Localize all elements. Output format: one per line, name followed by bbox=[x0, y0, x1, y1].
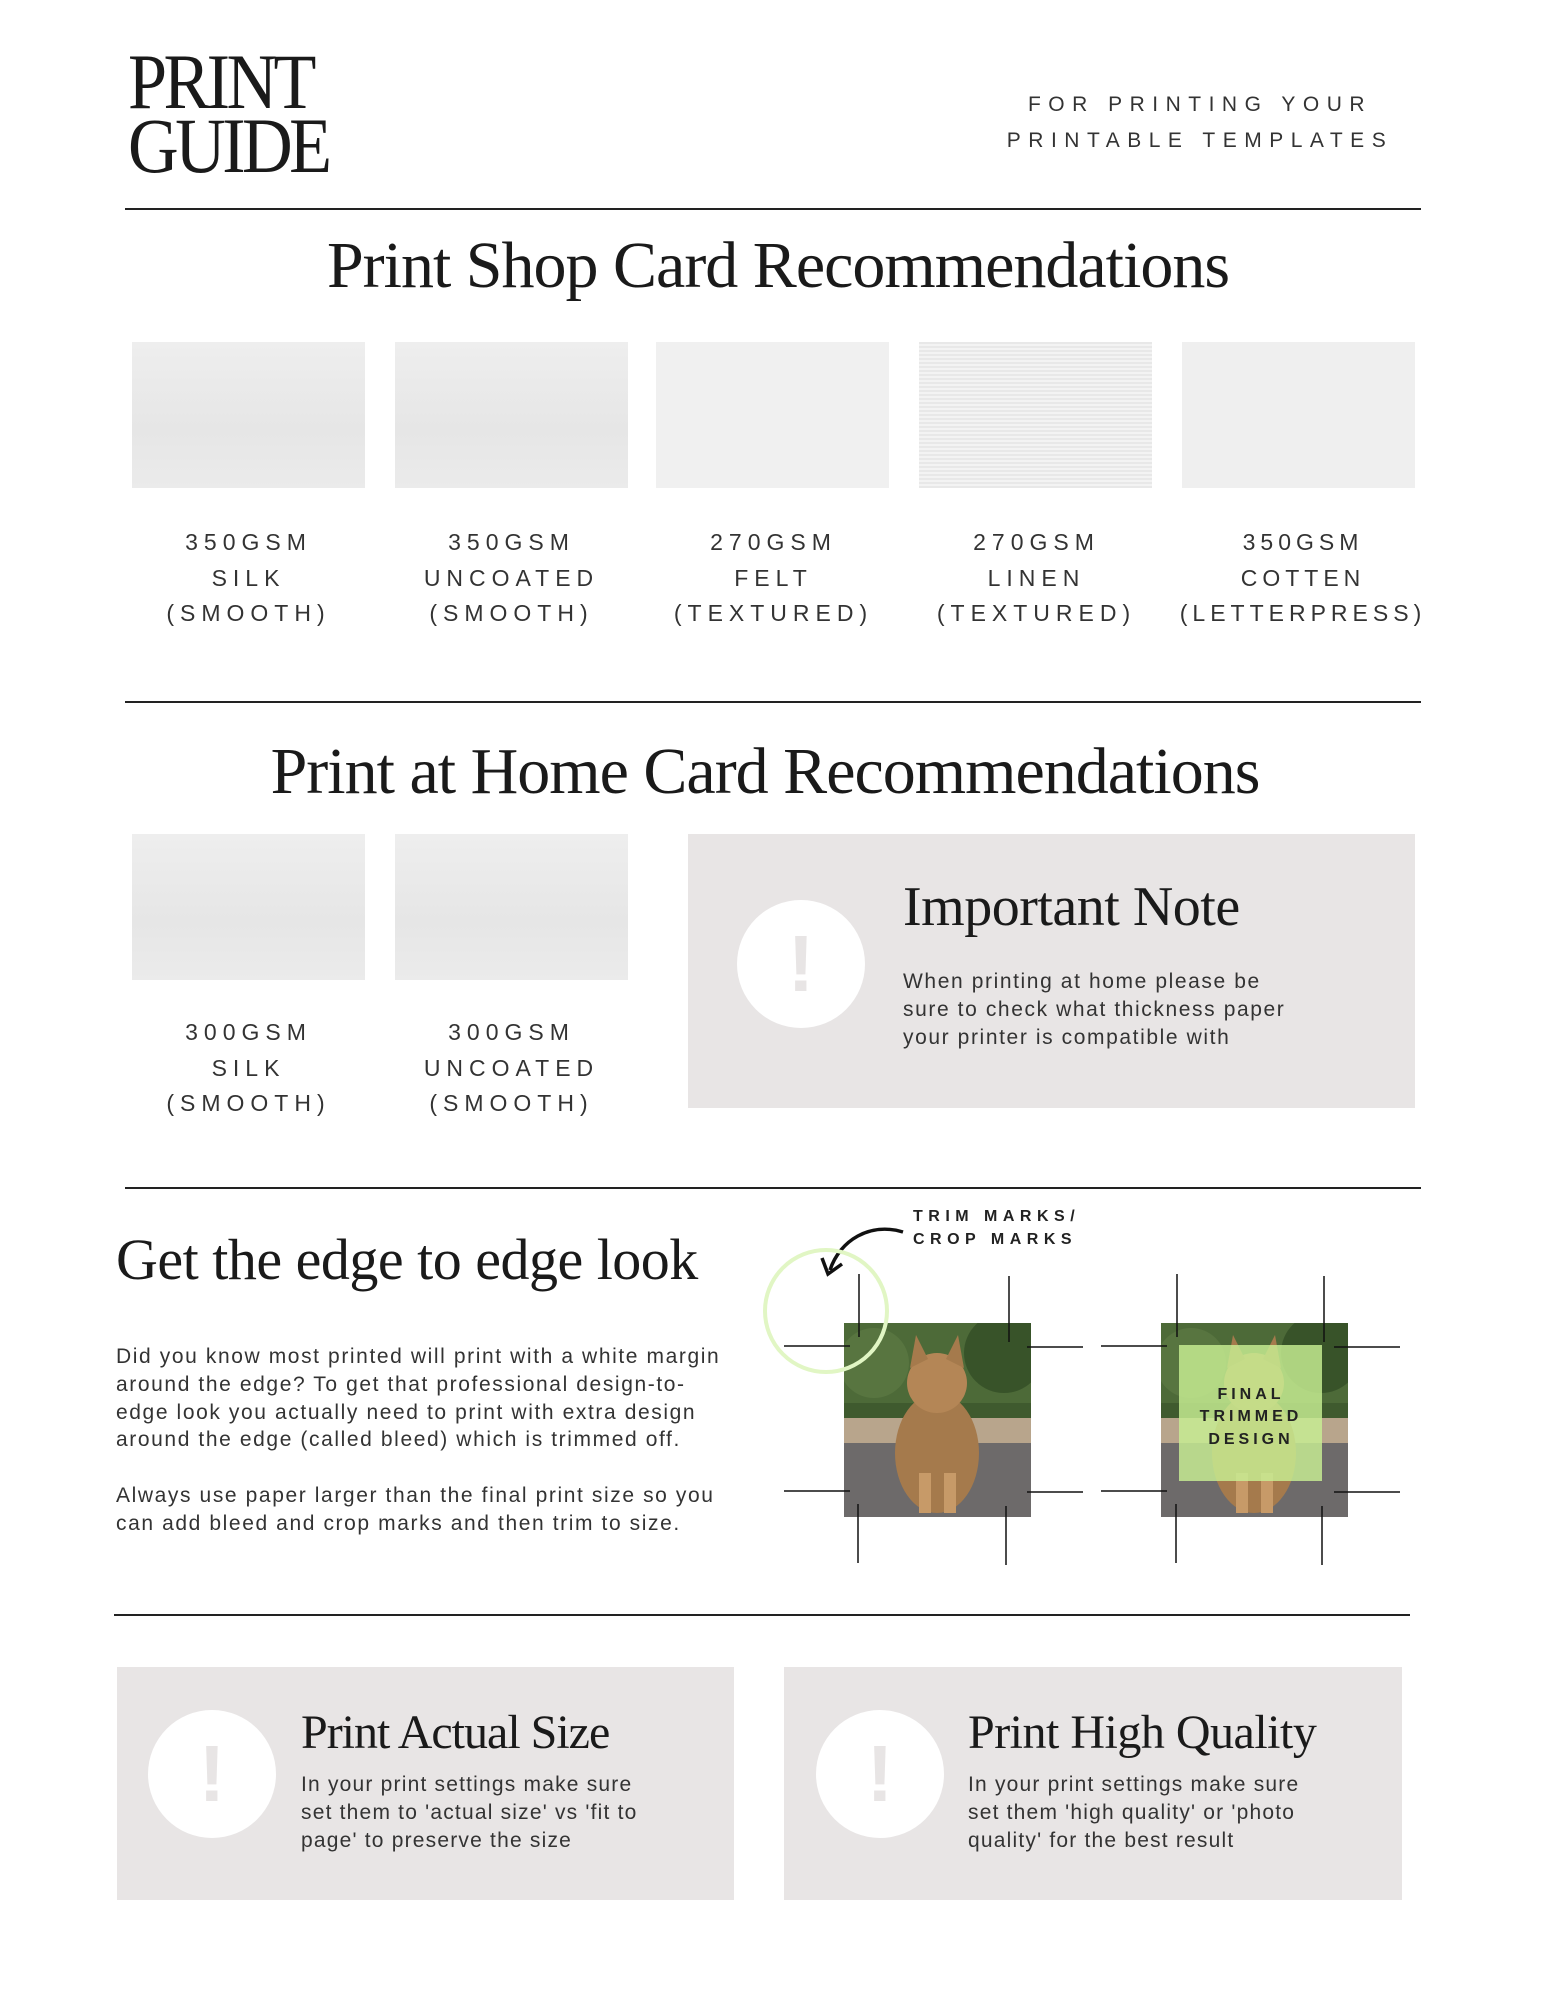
label: COTTEN bbox=[1241, 564, 1365, 590]
title: PRINT bbox=[128, 38, 313, 125]
icon: exclamation: ! bbox=[788, 919, 814, 1008]
label: SILK bbox=[212, 1054, 285, 1080]
text: quality' for the best result bbox=[968, 1829, 1234, 1852]
heading: print at home: Print at Home Card Recommendations bbox=[271, 735, 1259, 808]
heading: print shop: Print Shop Card Recommendations bbox=[327, 229, 1229, 302]
label: (TEXTURED) bbox=[674, 600, 873, 626]
diagram: crop marks bbox=[763, 1228, 1400, 1565]
title: GUIDE bbox=[128, 102, 328, 189]
icon: exclamation: ! bbox=[199, 1729, 225, 1818]
callout: trim marks: TRIM MARKS/ bbox=[913, 1208, 1080, 1225]
label: (SMOOTH) bbox=[166, 1090, 331, 1116]
text: bleed explanation: around the edge? To get that professional design-to- bbox=[116, 1373, 686, 1396]
text: In your print settings make sure bbox=[301, 1773, 632, 1796]
label: (TEXTURED) bbox=[937, 600, 1136, 626]
text: bleed explanation: Always use paper larger than the final print size so you bbox=[116, 1484, 715, 1507]
subtitle: PRINTABLE TEMPLATES bbox=[1007, 129, 1393, 152]
text bbox=[968, 1773, 1299, 1852]
panel: print high quality bbox=[784, 1667, 1402, 1900]
panel: print actual size bbox=[117, 1667, 734, 1900]
label: (SMOOTH) bbox=[429, 600, 594, 626]
text: bleed explanation: edge look you actually need to print with extra design bbox=[116, 1401, 696, 1424]
label: (SMOOTH) bbox=[429, 1090, 594, 1116]
label bbox=[674, 529, 873, 626]
callout: trim marks: CROP MARKS bbox=[913, 1231, 1077, 1248]
text: bleed explanation: can add bleed and crop marks and then trim to size. bbox=[116, 1512, 681, 1535]
text: bleed explanation: Did you know most printed will print with a white margin bbox=[116, 1345, 720, 1368]
icon: exclamation bbox=[148, 1710, 276, 1838]
text: page' to preserve the size bbox=[301, 1829, 572, 1852]
diagram: crop marks: DESIGN bbox=[1208, 1431, 1294, 1448]
swatch: silk bbox=[132, 834, 365, 980]
text: In your print settings make sure bbox=[968, 1773, 1299, 1796]
label bbox=[424, 529, 599, 626]
label: SILK bbox=[212, 564, 285, 590]
label bbox=[424, 1019, 599, 1116]
text: set them 'high quality' or 'photo bbox=[968, 1801, 1295, 1824]
diagram: crop marks: TRIMMED bbox=[1200, 1408, 1302, 1425]
swatch: uncoated bbox=[395, 342, 628, 488]
subtitle: FOR PRINTING YOUR bbox=[1028, 93, 1372, 116]
label: 300GSM bbox=[185, 1019, 312, 1045]
swatch: felt bbox=[656, 342, 889, 488]
text: bleed explanation bbox=[116, 1345, 720, 1535]
label: 350GSM bbox=[1243, 529, 1363, 555]
label: LINEN bbox=[988, 564, 1085, 590]
subtitle bbox=[1007, 93, 1393, 152]
label: FELT bbox=[734, 564, 813, 590]
text bbox=[301, 1773, 638, 1852]
heading: Print High Quality bbox=[968, 1706, 1316, 1759]
panel: important note bbox=[688, 834, 1415, 1108]
label: (SMOOTH) bbox=[166, 600, 331, 626]
note text: sure to check what thickness paper bbox=[903, 998, 1285, 1021]
diagram: crop marks: FINAL bbox=[1217, 1386, 1285, 1403]
green highlight circle bbox=[765, 1250, 887, 1372]
arrow bbox=[830, 1229, 903, 1270]
panel: print shop swatches bbox=[132, 342, 1426, 626]
swatch: silk bbox=[132, 342, 365, 488]
swatch: uncoated bbox=[395, 834, 628, 980]
note text: When printing at home please be bbox=[903, 970, 1261, 993]
label: 350GSM bbox=[185, 529, 312, 555]
label: (LETTERPRESS) bbox=[1180, 600, 1426, 626]
note heading: Important Note bbox=[903, 876, 1240, 938]
label: UNCOATED bbox=[424, 1054, 599, 1080]
label: 350GSM bbox=[448, 529, 575, 555]
text: bleed explanation: around the edge (called bleed) which is trimmed off. bbox=[116, 1428, 681, 1451]
title bbox=[128, 38, 328, 189]
label: 270GSM bbox=[710, 529, 837, 555]
icon: exclamation bbox=[816, 1710, 944, 1838]
icon: exclamation bbox=[737, 900, 865, 1028]
swatch: cotton bbox=[1182, 342, 1415, 488]
panel: home swatches bbox=[132, 834, 628, 1116]
label: 270GSM bbox=[973, 529, 1100, 555]
label: UNCOATED bbox=[424, 564, 599, 590]
label bbox=[166, 1019, 331, 1116]
note text: your printer is compatible with bbox=[903, 1026, 1230, 1049]
label bbox=[1180, 529, 1426, 626]
heading: Print Actual Size bbox=[301, 1706, 609, 1759]
label bbox=[937, 529, 1136, 626]
callout: trim marks bbox=[913, 1208, 1080, 1248]
swatch: linen bbox=[919, 342, 1152, 488]
label: 300GSM bbox=[448, 1019, 575, 1045]
icon: exclamation: ! bbox=[867, 1729, 893, 1818]
text: set them to 'actual size' vs 'fit to bbox=[301, 1801, 638, 1824]
heading: edge to edge: Get the edge to edge look bbox=[116, 1227, 698, 1292]
note text bbox=[903, 970, 1285, 1049]
label bbox=[166, 529, 331, 626]
